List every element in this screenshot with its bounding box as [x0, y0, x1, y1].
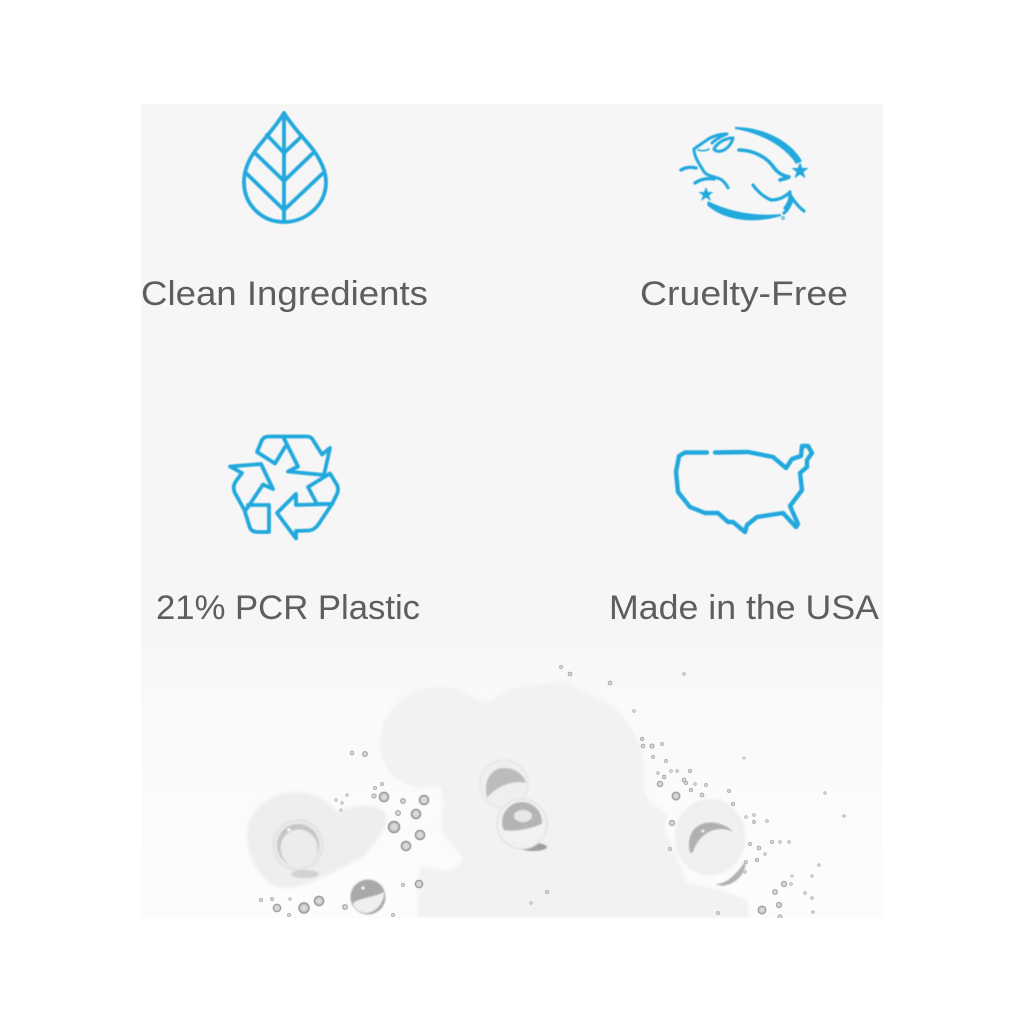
- right water puddle: [676, 800, 744, 874]
- top arrow: [283, 436, 330, 475]
- water bead: right large: [689, 822, 746, 886]
- label: 21% PCR Plastic: 21% PCR Plastic: [156, 589, 420, 627]
- bottom arc: [707, 201, 781, 220]
- registered mark: [781, 216, 785, 220]
- icon: leaf drop: [244, 113, 326, 222]
- water bead: lower centre: [497, 799, 547, 851]
- icon: leaping bunny: [681, 127, 808, 220]
- water splash image: [259, 665, 846, 918]
- right arrow: [277, 494, 332, 538]
- rabbit body: [681, 134, 804, 213]
- label: Clean Ingredients: Clean Ingredients: [141, 275, 428, 313]
- icon: recycling arrows: [230, 436, 338, 538]
- star left: [698, 187, 714, 201]
- icon: USA map outline: [676, 446, 812, 532]
- large water puddle: [382, 719, 748, 916]
- panel: background: [141, 104, 883, 918]
- top arc: [735, 127, 802, 164]
- water droplets: [259, 665, 846, 920]
- label: Cruelty-Free: Cruelty-Free: [640, 275, 848, 313]
- water bead: upper centre: [480, 760, 528, 808]
- star right: [792, 162, 808, 178]
- water bead: bottom centre: [350, 880, 386, 914]
- left arrow: [230, 464, 273, 511]
- water bead: left large: [273, 820, 323, 878]
- small water puddle: [247, 792, 387, 888]
- label: Made in the USA: Made in the USA: [609, 589, 879, 627]
